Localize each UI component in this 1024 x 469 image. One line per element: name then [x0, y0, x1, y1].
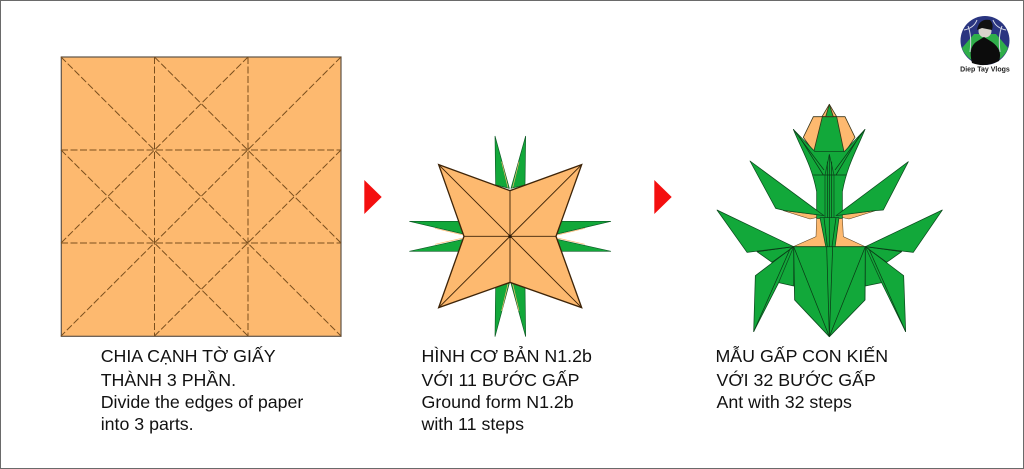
panel: finished ant model — [717, 104, 942, 337]
ant thorax — [783, 211, 876, 247]
arrow: second red arrow — [654, 180, 672, 214]
logo caption: Diep Tay Vlogs — [960, 66, 1010, 74]
text block: step 3 caption: MẪU GẤP CON KIẾN — [716, 345, 888, 366]
text block: step 2 caption: Ground form N1.2b — [422, 392, 574, 412]
text block: step 1 caption: into 3 parts. — [101, 414, 194, 434]
orange star body — [439, 165, 582, 308]
ant crease lines — [754, 129, 906, 337]
green spikes — [409, 136, 611, 337]
orange edges of spikes — [435, 162, 585, 311]
logo: Diep Tay Vlogs — [960, 16, 1010, 74]
text block: step 1 caption: CHIA CẠNH TỜ GIẤY — [101, 345, 276, 366]
ant neck and antennae — [750, 129, 908, 248]
arrow: first red arrow — [364, 180, 382, 214]
text block: step 3 caption: Ant with 32 steps — [716, 392, 852, 412]
text block: step 2 caption: VỚI 11 BƯỚC GẤP — [422, 369, 580, 390]
ant head — [803, 104, 855, 153]
text block: step 3 caption — [716, 345, 888, 412]
ant back and lower legs — [717, 210, 942, 332]
text block: step 2 caption: with 11 steps — [420, 414, 524, 434]
text block: step 2 caption — [420, 345, 592, 434]
panel: square paper with fold lines — [61, 57, 341, 336]
text block: step 1 caption — [101, 345, 303, 434]
text block: step 3 caption: VỚI 32 BƯỚC GẤP — [716, 369, 876, 390]
text block: step 1 caption: THÀNH 3 PHẦN. — [101, 369, 236, 390]
text block: step 1 caption: Divide the edges of paper — [101, 392, 303, 412]
ant abdomen — [794, 247, 865, 337]
panel: ground form star — [409, 136, 611, 337]
text block: step 2 caption: HÌNH CƠ BẢN N1.2b — [422, 345, 592, 366]
